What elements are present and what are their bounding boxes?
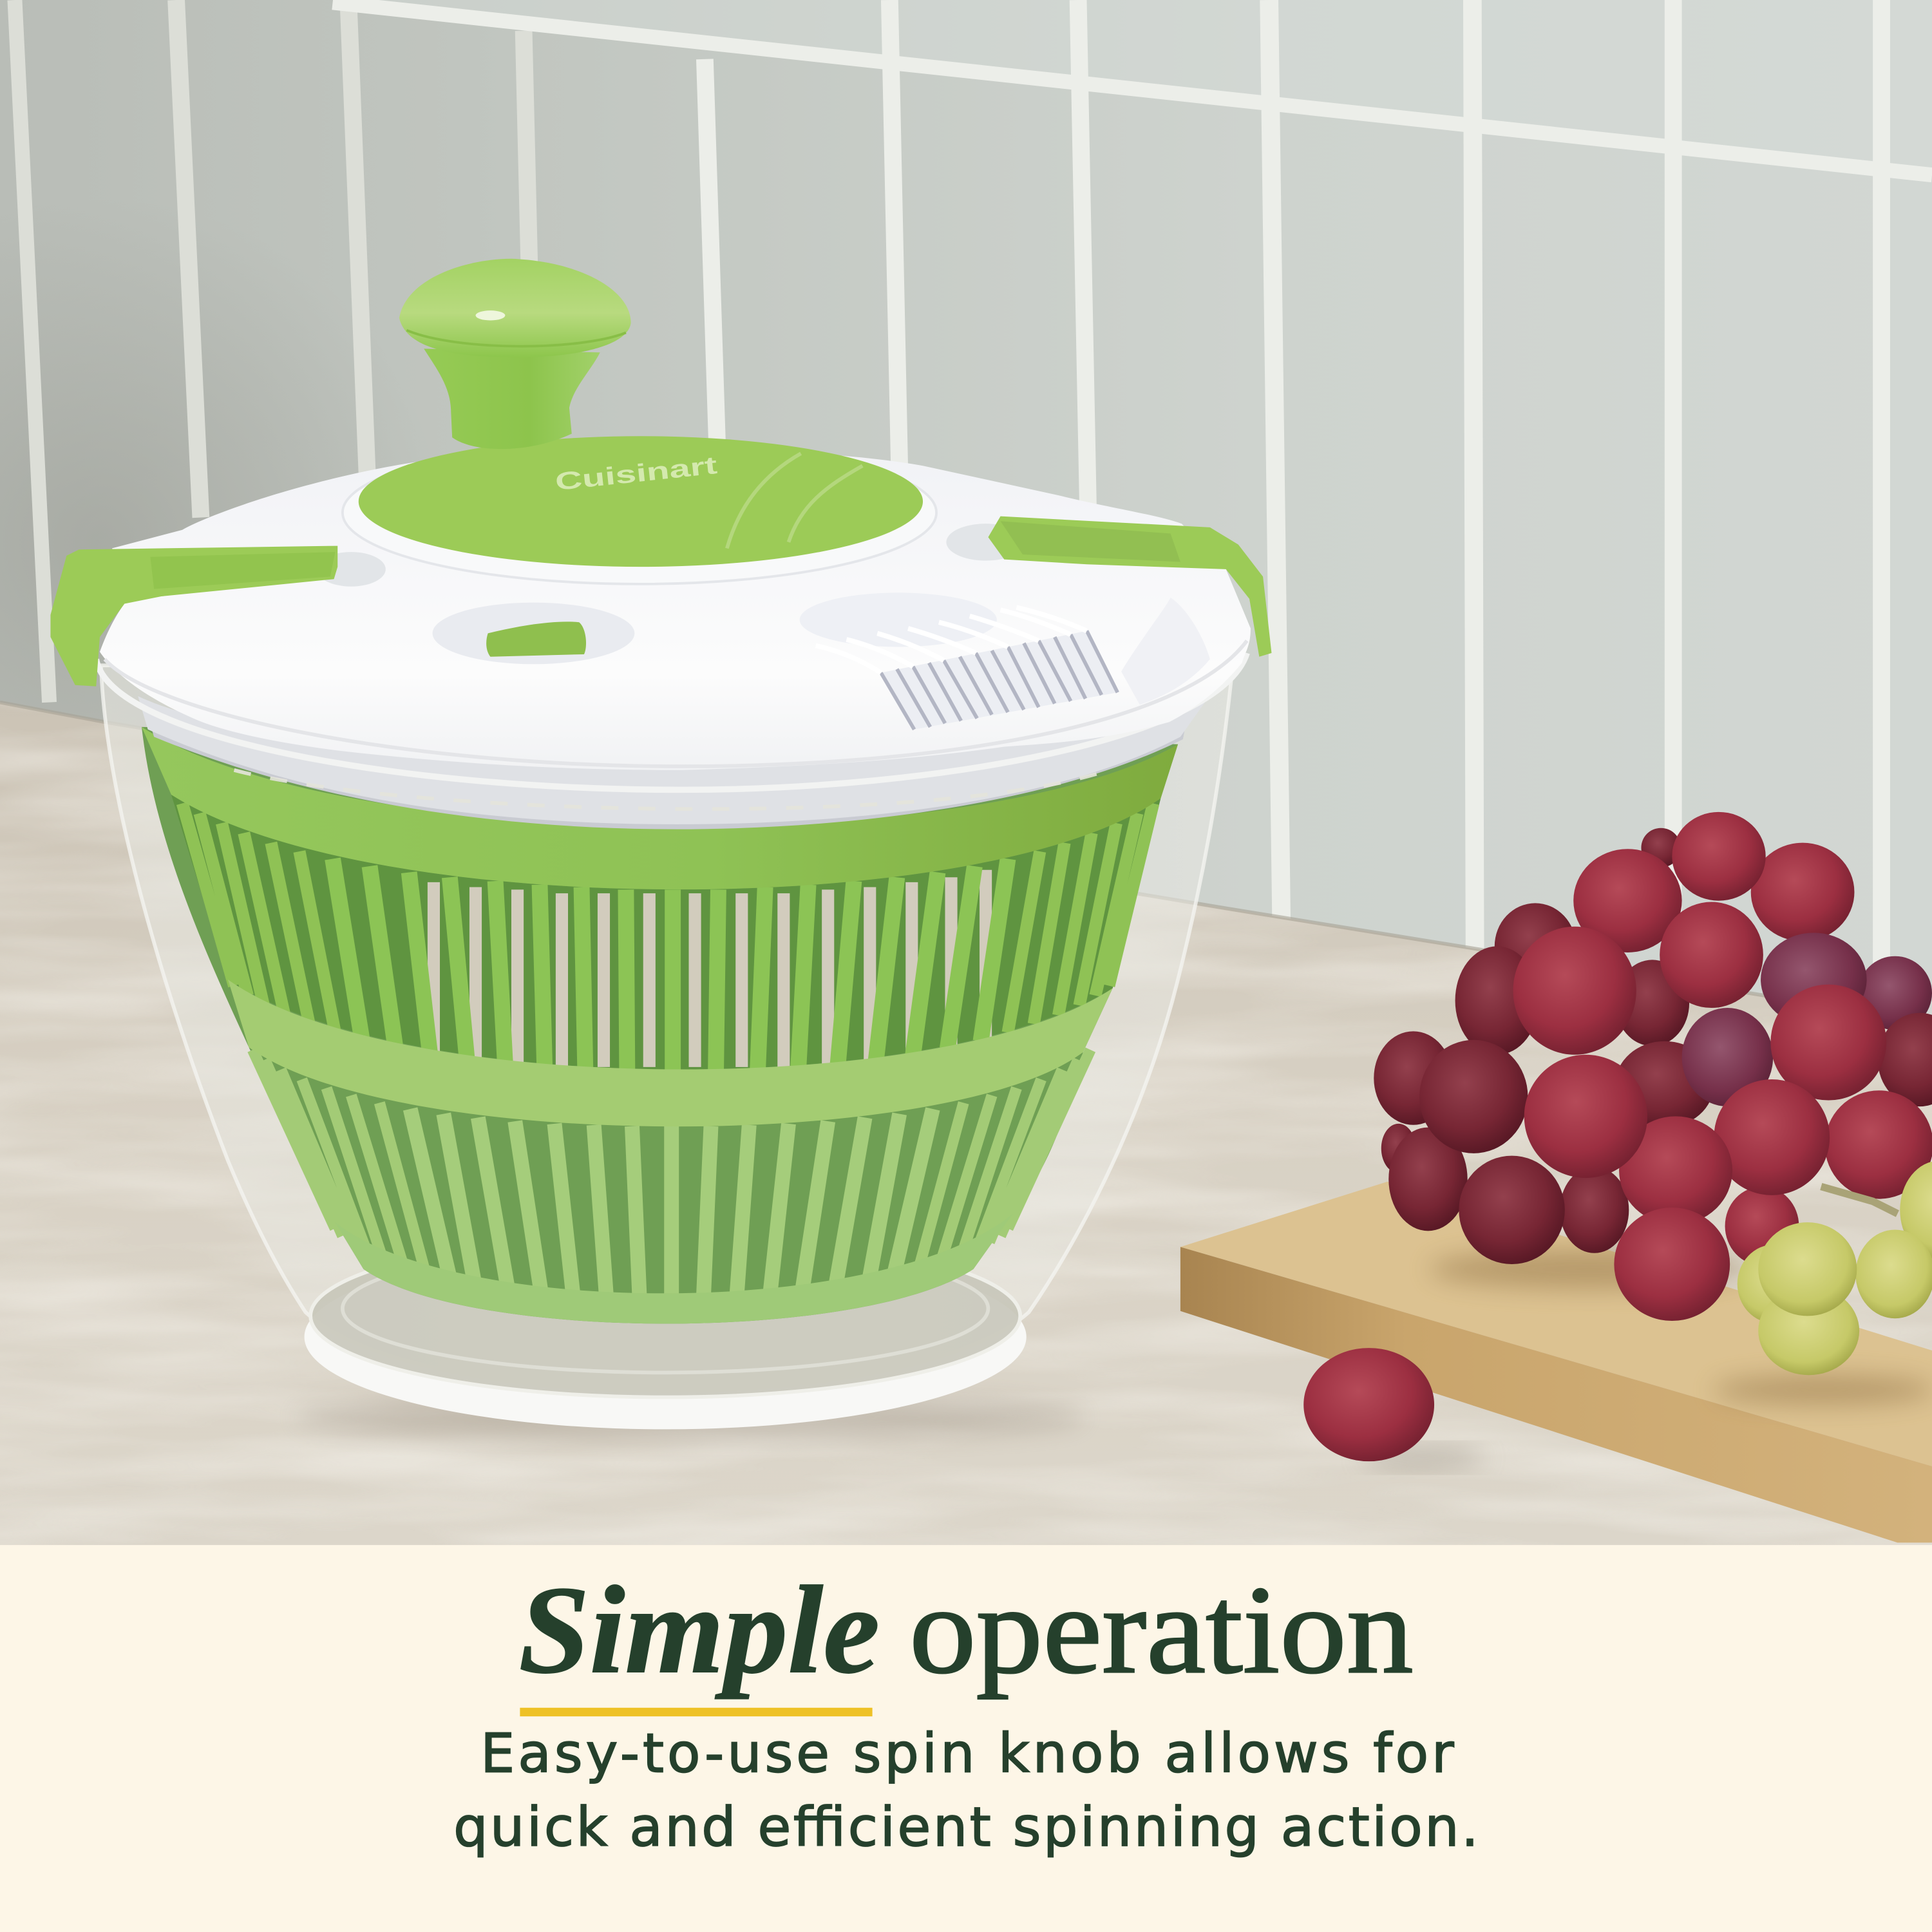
body line 2: quick and efficient spinning action. [453,1795,1479,1859]
clear bowl rim [96,653,1247,790]
central knob ring [343,441,936,584]
middle band [228,980,1113,1126]
lid edge line [105,641,1247,766]
right latch [988,516,1271,657]
single red grape [1303,1348,1484,1466]
center and front red grapes [1524,1055,1730,1321]
title word: Simple: Simple [518,1560,880,1700]
grape shadows on board [1429,1249,1932,1405]
far right dark grape [1878,1013,1932,1106]
title word: operation: operation [909,1560,1414,1700]
lid finger recess [800,592,997,647]
glass disc at bowl base [310,1235,1020,1397]
photo background: wall and counter [0,0,1932,1545]
upper row slats [333,859,1008,1072]
caption panel [0,1545,1932,1932]
bottom band [335,1214,1013,1323]
top rim band [142,727,1178,889]
purple-toned grapes [1682,933,1932,1106]
middle grapes [1573,812,1854,1008]
dark left-front grapes [1419,1040,1565,1264]
green lid disc [359,436,923,567]
clear bowl [101,665,1232,1391]
basket silhouette [142,727,1178,1323]
upper row outer slats [182,803,1153,1032]
inner white spinner plate [138,690,1214,829]
white lid [100,448,1251,770]
body line 1: Easy-to-use spin knob allows for [480,1721,1454,1785]
lower row outer slats [252,1050,1090,1271]
left lid hole [317,552,386,587]
yellow underline [520,1708,873,1716]
grape bunch [1374,812,1932,1321]
white base ring [305,1244,1027,1429]
lower row slats [410,1109,933,1296]
cutting board [1180,1182,1932,1542]
salad spinner [50,259,1271,1429]
pale background through upper openings [433,870,986,1067]
green basket [142,727,1178,1323]
lid side facet [1121,598,1210,705]
upper row openings [171,795,1160,1070]
lid grip ribs [816,607,1117,730]
spin knob [399,259,631,449]
right lid hole [946,524,1025,561]
green grapes [1738,1160,1932,1375]
back grapes [1374,828,1714,1253]
lid hole with green pin [433,603,634,664]
front grapes [1513,927,1932,1265]
brand mark: Cuisinart [554,451,719,496]
left latch [50,546,337,687]
lower row openings [249,1047,1083,1293]
spinner shadow on counter [296,1395,1084,1439]
